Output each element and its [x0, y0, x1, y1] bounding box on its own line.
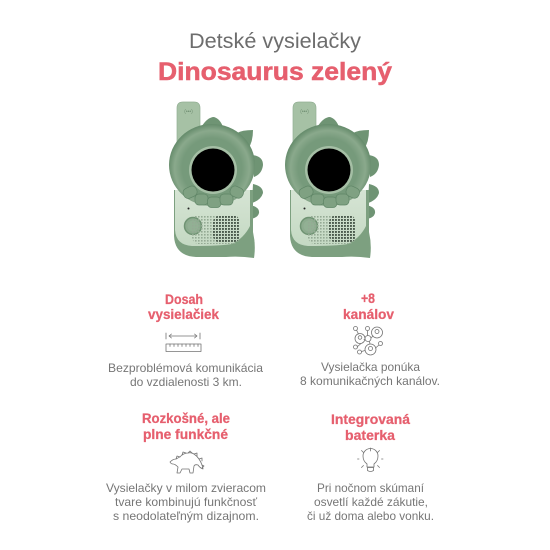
text: design description: Vysielačky v milom zvieracom	[106, 481, 266, 495]
heading: Rozkošné, ale plne funkčné: Rozkošné, ale	[142, 411, 230, 426]
heading: +8 kanálov: +8	[361, 291, 375, 306]
ring housing	[169, 124, 255, 206]
heading: Rozkošné, ale plne funkčné	[142, 411, 230, 442]
dino spikes	[200, 117, 263, 219]
screen bezel	[189, 146, 237, 194]
icon: network of people	[354, 326, 382, 355]
text: battery description: či už doma alebo vonku.	[307, 509, 434, 523]
text: battery description: Pri nočnom skúmaní	[317, 481, 425, 495]
heading: Dosah vysielačiek: Dosah	[165, 292, 203, 307]
text: range description: do vzdialenosti 3 km.	[130, 375, 242, 389]
screen	[192, 148, 234, 192]
antenna	[293, 102, 316, 148]
buttons	[182, 184, 245, 208]
heading: Integrovaná baterka: baterka	[345, 428, 396, 443]
lower body	[174, 190, 255, 258]
title: Dinosaurus zelený: Dinosaurus zelený	[158, 58, 392, 86]
heading: +8 kanálov	[343, 291, 394, 322]
walkie-talkie left	[169, 102, 263, 258]
text: channels description: Vysielačka ponúka	[321, 360, 420, 374]
panel: range	[108, 292, 263, 389]
text: range description	[108, 361, 263, 389]
antenna mark: (•••)	[184, 109, 193, 115]
text: channels description: 8 komunikačných kanálov.	[300, 374, 440, 388]
text: range description: Bezproblémová komunikácia	[108, 361, 263, 375]
antenna mark: (•••)	[300, 109, 309, 115]
LED indicator	[304, 208, 306, 210]
title: Detské vysielačky: Detské vysielačky	[189, 30, 362, 53]
walkie-talkie right	[285, 102, 379, 258]
screen bezel	[305, 146, 353, 194]
icon: light bulb	[358, 448, 383, 472]
heading: Dosah vysielačiek: vysielačiek	[148, 307, 219, 322]
icon: ruler	[166, 333, 201, 352]
panel: battery	[307, 412, 434, 523]
buttons	[298, 184, 361, 208]
PTT button	[300, 218, 318, 234]
speaker grille	[192, 215, 240, 244]
panel: design	[106, 411, 266, 523]
heading: Integrovaná baterka: Integrovaná	[331, 412, 410, 427]
dino spikes	[316, 117, 379, 219]
LED indicator	[188, 208, 190, 210]
light front panel	[291, 190, 366, 246]
text: battery description: osvetlí každé zákutie,	[314, 495, 428, 509]
antenna	[177, 102, 200, 148]
text: design description	[106, 481, 266, 523]
screen	[308, 148, 350, 192]
heading: +8 kanálov: kanálov	[343, 307, 394, 322]
text: design description: tvare kombinujú funkčnosť	[115, 495, 257, 509]
icon: dinosaur	[170, 451, 204, 473]
light front panel	[175, 190, 250, 246]
heading: Integrovaná baterka	[331, 412, 410, 443]
PTT button	[184, 218, 202, 234]
panel: channels	[300, 291, 440, 388]
heading: Dosah vysielačiek	[148, 292, 219, 322]
speaker grille	[308, 215, 356, 244]
text: design description: s neodolateľným dizajnom.	[113, 509, 259, 523]
heading: Rozkošné, ale plne funkčné: plne funkčné	[143, 427, 228, 442]
ring housing	[285, 124, 371, 206]
text: battery description	[307, 481, 434, 523]
text: channels description	[300, 360, 440, 388]
lower body	[290, 190, 371, 258]
